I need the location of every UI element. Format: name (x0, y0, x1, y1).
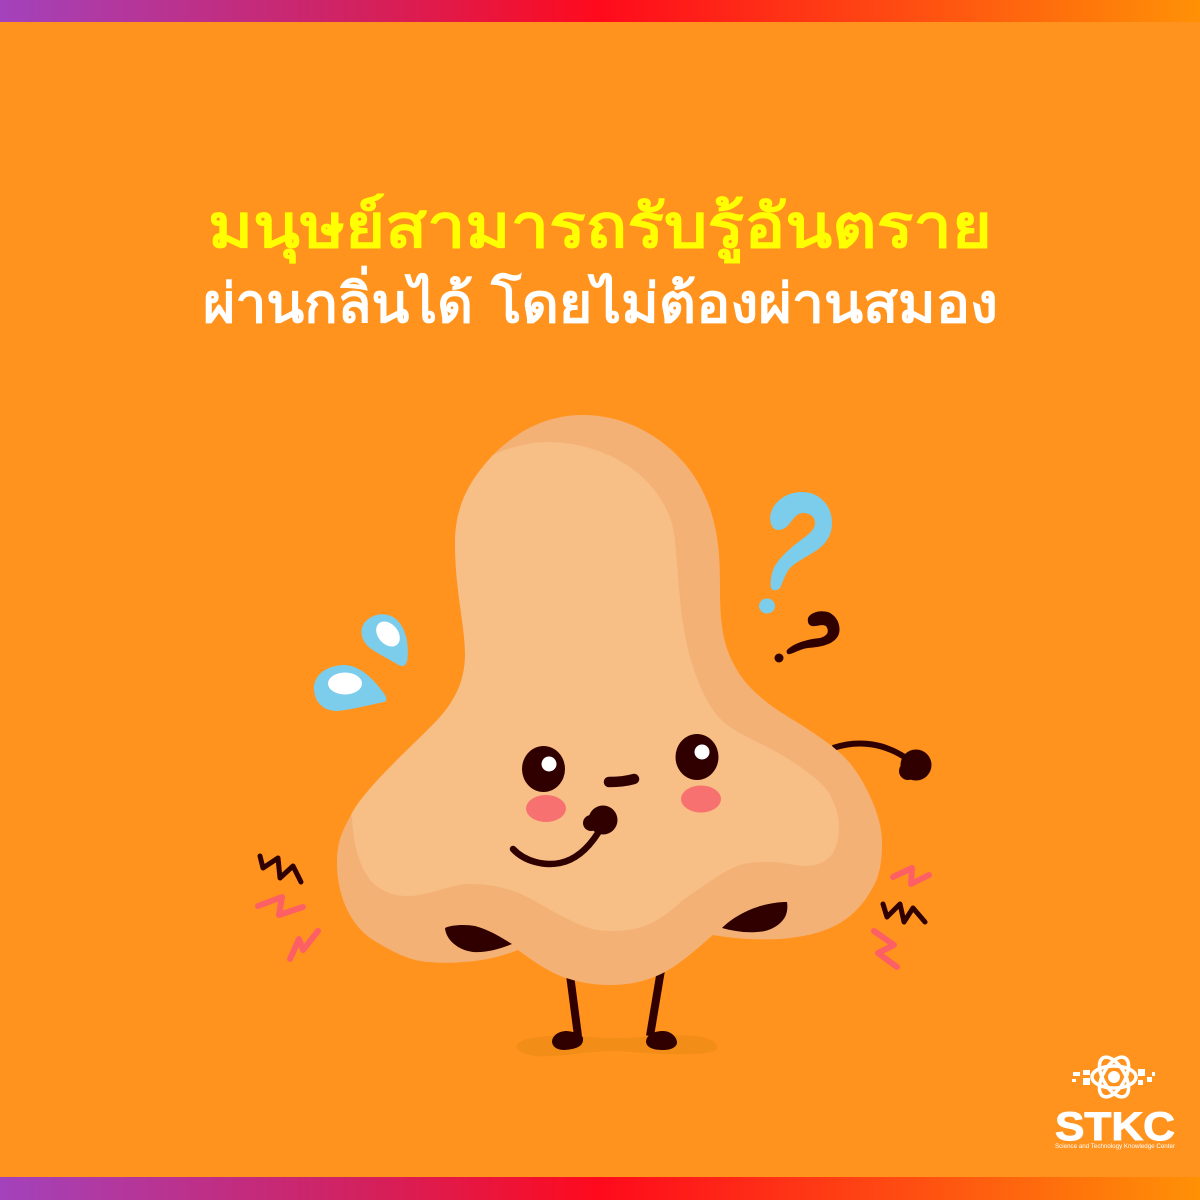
left eye (522, 746, 565, 792)
title (203, 193, 998, 334)
smile and hand (513, 806, 618, 864)
red zigzag right top (893, 868, 929, 884)
ground shadow (517, 1035, 717, 1056)
STKC logo (1055, 1052, 1175, 1150)
logo atom emblem (1072, 1052, 1155, 1102)
left motion marks (258, 856, 318, 959)
sweat drop lower (314, 665, 386, 711)
left leg (552, 975, 583, 1050)
right motion marks (874, 868, 929, 967)
red zigzag right bottom (874, 931, 897, 967)
winking brow mark (609, 779, 634, 782)
dark question mark (774, 611, 840, 662)
right leg (646, 970, 677, 1050)
logo wordmark: STKC (1055, 1105, 1175, 1149)
title line 2: ผ่านกลิ่นได้ (203, 265, 473, 334)
red zigzag left bottom (290, 931, 318, 959)
dark squiggle right (883, 904, 925, 922)
right arm (833, 743, 932, 780)
blue question mark (759, 492, 832, 614)
left cheek (526, 795, 566, 822)
title line 2: โดยไม่ต้องผ่านสมอง (490, 272, 998, 334)
nose light face area (330, 442, 839, 931)
nose outer shape (337, 415, 882, 985)
sweat drop upper (361, 614, 408, 666)
top gradient bar (0, 0, 1200, 22)
right eye (676, 734, 718, 780)
dark squiggle left (260, 856, 301, 882)
title line 2 (203, 265, 998, 334)
nose character (330, 415, 932, 1056)
left nostril (445, 925, 512, 952)
title line 1: มนุษย์สามารถรับรู้อันตราย (208, 193, 992, 264)
logo tagline: Science and Technology Knowledge Center (1055, 1144, 1175, 1150)
right cheek (681, 786, 721, 812)
right nostril (722, 902, 787, 932)
red zigzag left top (258, 897, 303, 915)
bottom gradient bar (0, 1177, 1200, 1200)
